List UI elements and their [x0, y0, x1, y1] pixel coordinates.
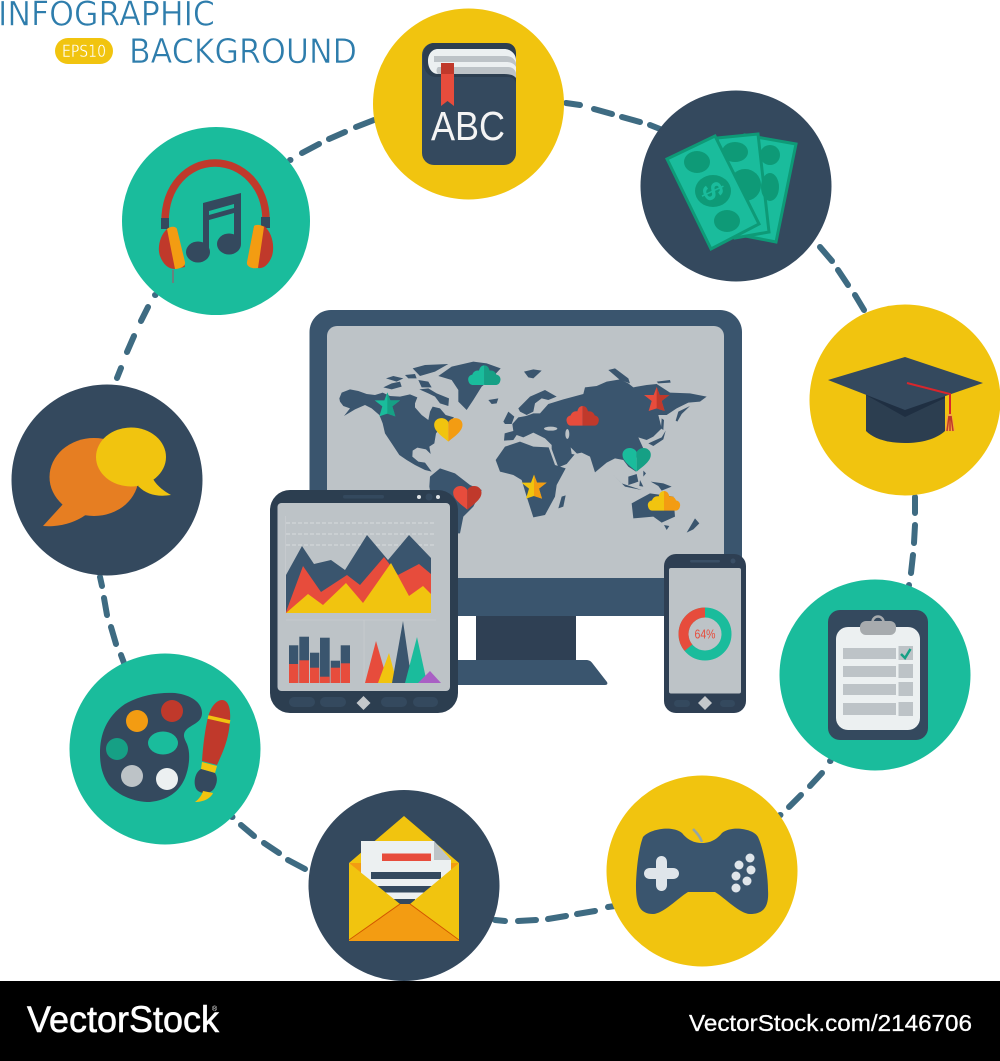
triangle peak chart — [365, 621, 441, 683]
monitor stand — [458, 612, 607, 685]
icon: clipboard checklist in teal circle — [780, 580, 970, 770]
heart marker: teal — [622, 448, 651, 472]
heart marker: red — [453, 486, 481, 510]
footer image id: VectorStock.com/2146706 — [689, 1010, 972, 1036]
star marker: teal — [375, 392, 400, 416]
icon: envelope in dark circle — [308, 790, 500, 981]
dashed connector ring — [100, 103, 915, 921]
cloud marker: yellow — [648, 491, 680, 511]
icon: headphones and music note in teal circle — [122, 127, 310, 315]
heart marker: yellow — [434, 418, 462, 442]
icon: book in yellow circle — [373, 8, 564, 200]
monitor — [310, 310, 742, 685]
tablet buttons — [289, 696, 438, 710]
world map — [339, 362, 707, 533]
donut chart 64% — [684, 612, 726, 656]
badge: EPS10 — [55, 38, 113, 64]
icon: paint palette in teal circle — [70, 654, 260, 844]
donut chart 64%: 64% — [694, 626, 716, 642]
icon: book in yellow circle: ABC — [431, 103, 505, 149]
phone buttons — [674, 696, 735, 710]
paintbrush — [195, 700, 230, 802]
area chart — [286, 535, 431, 613]
monitor screen with world map — [327, 326, 724, 578]
map markers — [375, 365, 680, 511]
star marker: red — [644, 387, 669, 411]
footer registered mark: ® — [212, 1005, 218, 1013]
footer logo text: VectorStock — [27, 999, 219, 1040]
stacked bar chart — [289, 637, 350, 683]
heading line: BACKGROUND: BACKGROUND — [129, 32, 357, 72]
cloud marker: red — [566, 406, 599, 426]
icon: graduation cap in yellow circle — [810, 304, 1000, 496]
icon: banknotes in dark circle: $ — [694, 177, 730, 205]
title: infographic background — [0, 0, 357, 72]
phone — [664, 554, 746, 713]
icon: game controller in yellow circle — [606, 776, 798, 966]
icon: speech bubbles in dark circle — [12, 384, 202, 576]
icon: banknotes in dark circle — [640, 90, 832, 282]
cloud marker: teal — [468, 365, 500, 385]
monitor body — [310, 310, 742, 616]
badge: EPS10: EPS10 — [62, 42, 106, 62]
footer watermark bar — [0, 981, 1000, 1061]
star marker: yellow — [521, 475, 547, 499]
tablet — [270, 490, 458, 713]
